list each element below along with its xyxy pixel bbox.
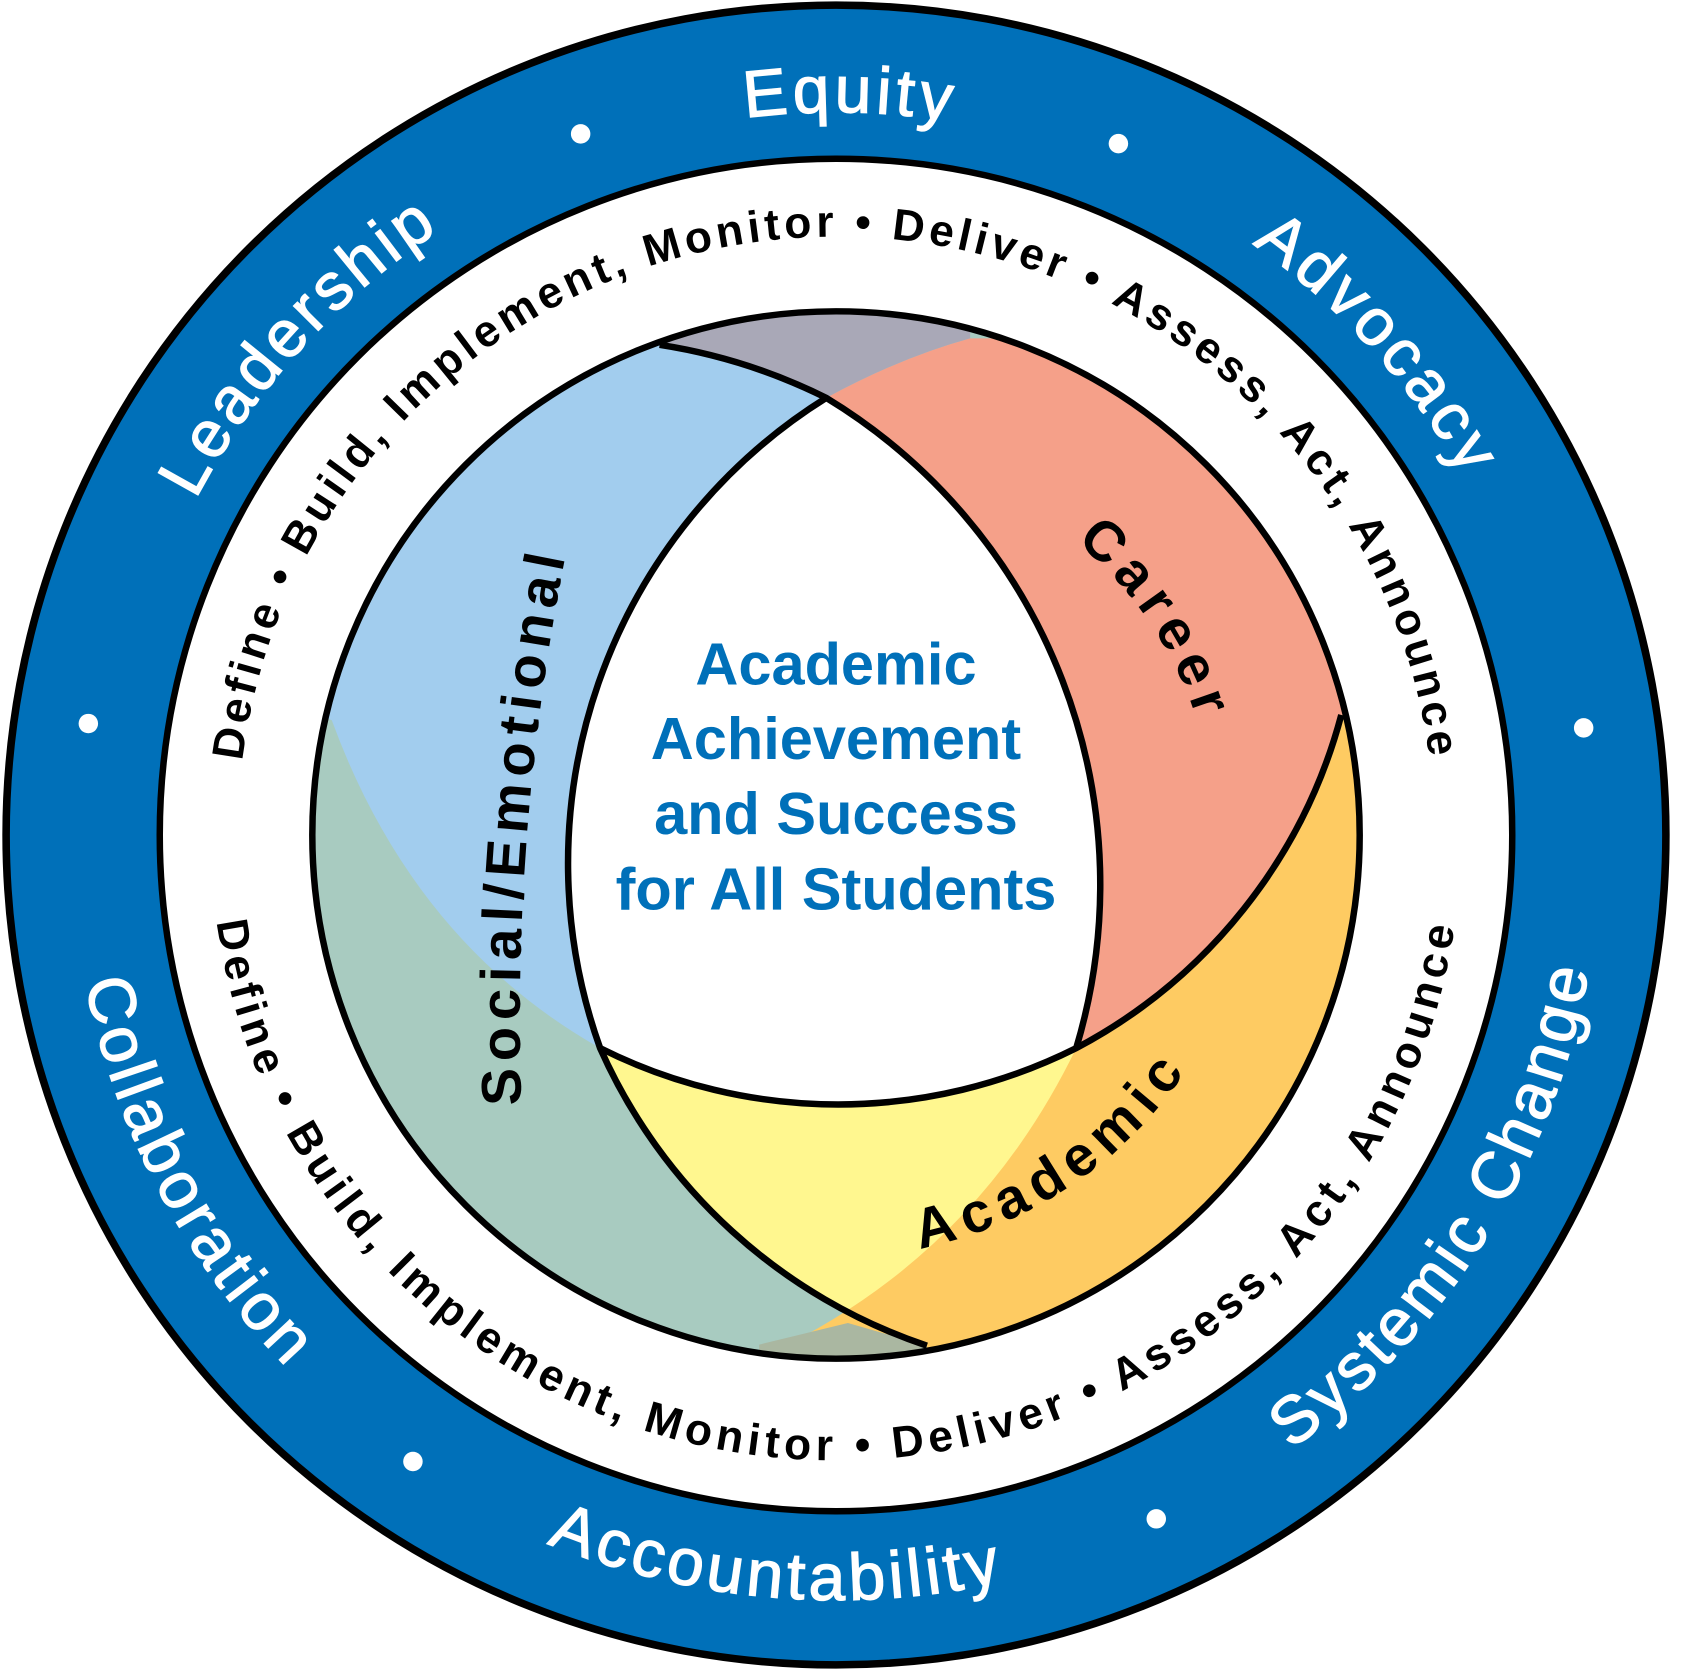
outer ring labels: Equity bbox=[746, 65, 956, 132]
center title: and Success bbox=[654, 780, 1018, 847]
domain labels: Career bbox=[1084, 520, 1224, 710]
ring outlines bbox=[312, 311, 1360, 1359]
center title: Achievement bbox=[651, 705, 1021, 772]
domain labels bbox=[479, 520, 1224, 1249]
center title bbox=[616, 631, 1056, 923]
outer ring labels: Advocacy bbox=[1252, 218, 1494, 466]
domain labels: Academic bbox=[921, 1060, 1180, 1249]
center white shape bbox=[568, 398, 1100, 1104]
outer ring labels: Systemic Change bbox=[1271, 968, 1591, 1444]
center title: Academic bbox=[695, 631, 977, 698]
outer ring labels: Accountability bbox=[546, 1506, 996, 1602]
process text ring: Define • Build, Implement, Monitor • Deliver • Assess, Act, Announce bbox=[216, 920, 1454, 1460]
outer ring labels: Collaboration bbox=[88, 978, 306, 1365]
outer ring labels: Leadership bbox=[158, 208, 432, 496]
center title: for All Students bbox=[616, 856, 1056, 923]
domain labels: Social/Emotional bbox=[479, 554, 564, 1104]
colored domain ring bbox=[316, 314, 1356, 1356]
process text ring bbox=[212, 209, 1454, 1460]
process text ring: Define • Build, Implement, Monitor • Deliver • Assess, Act, Announce bbox=[212, 209, 1452, 758]
outer ring dots bbox=[79, 124, 1593, 1529]
